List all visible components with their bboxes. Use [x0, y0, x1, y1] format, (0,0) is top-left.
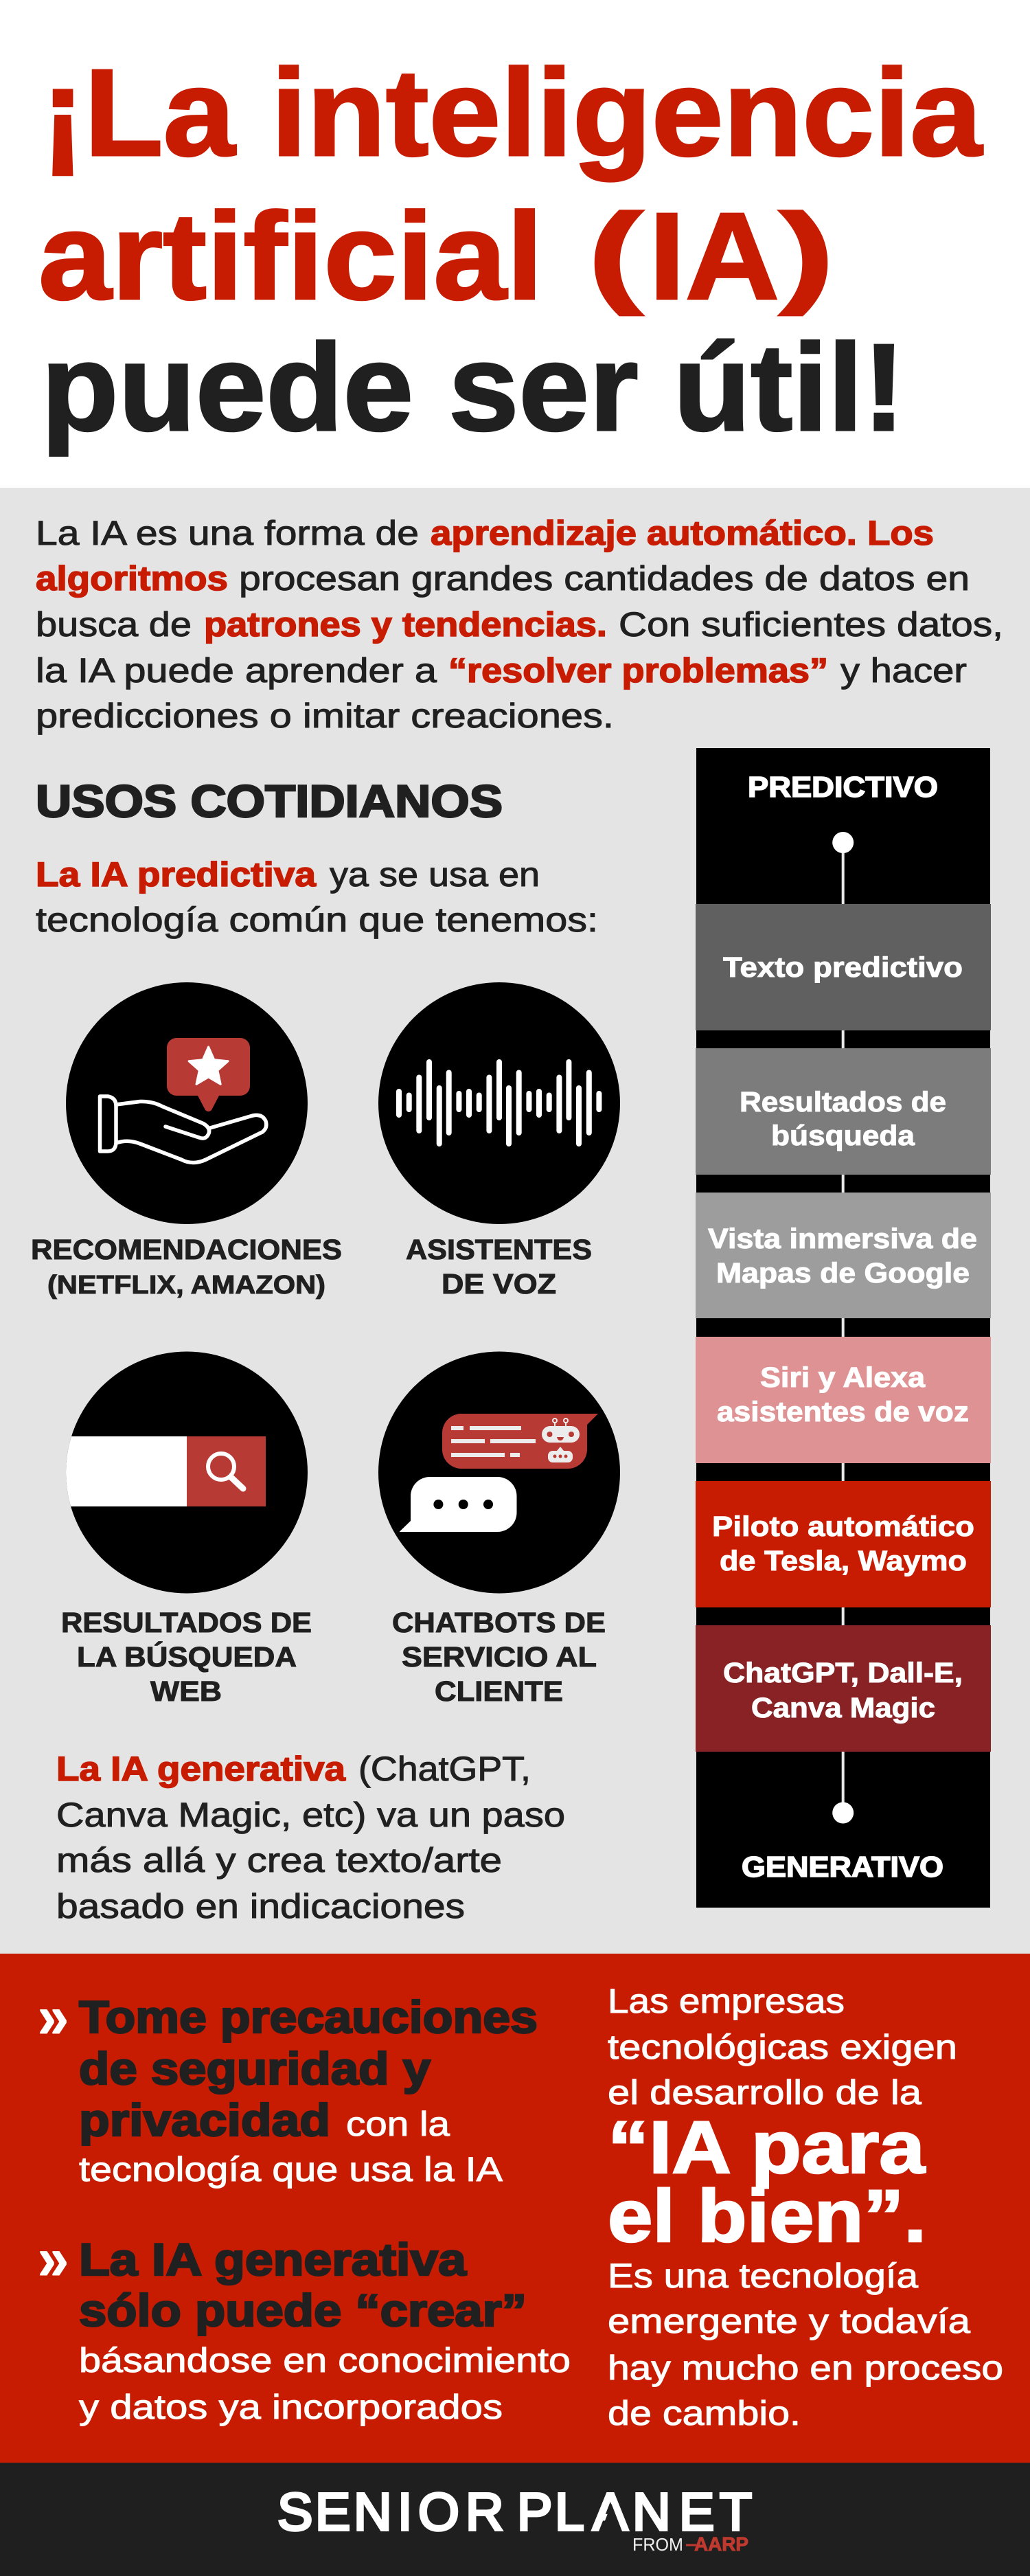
label: recomendaciones — [31, 1234, 342, 1300]
label: asistentes de voz: ASISTENTES — [406, 1234, 592, 1265]
logo: senior planet from aarp: FROM — [632, 2534, 683, 2555]
step: chatgpt: ChatGPT, Dall-E, — [723, 1657, 963, 1688]
text block: introduction: procesan grandes cantidades de datos en — [239, 559, 970, 598]
title: artificial — [38, 188, 543, 326]
step: resultados de búsqueda: búsqueda — [771, 1120, 915, 1151]
step: piloto automático: Piloto automático — [712, 1511, 974, 1542]
text block: introduction: Con suficientes datos, — [619, 605, 1003, 644]
step: texto predictivo: Texto predictivo — [723, 951, 963, 983]
text block: generative AI: Canva Magic, etc) va un paso — [56, 1796, 565, 1834]
label: asistentes de voz — [406, 1234, 592, 1300]
spectrum start dot — [832, 832, 854, 853]
callout: generative limits: La IA generativa — [79, 2234, 467, 2285]
logo: senior planet from aarp: AARP — [694, 2533, 748, 2555]
logo: senior planet from aarp: SENIOR — [277, 2483, 504, 2542]
step: resultados de búsqueda: Resultados de — [740, 1086, 946, 1118]
callout: generative limits: sólo puede “crear” — [79, 2285, 527, 2336]
label: resultados de la búsqueda web: WEB — [150, 1675, 222, 1707]
emphasis: ia para el bien — [608, 2105, 926, 2257]
step: siri y alexa: Siri y Alexa — [760, 1362, 926, 1393]
text block: predictive AI: ya se usa en — [330, 855, 540, 894]
panel: footer — [0, 2463, 1030, 2576]
title: IA — [649, 188, 779, 326]
icon: chatbot speech bubbles — [378, 1352, 620, 1594]
step: siri y alexa: asistentes de voz — [717, 1396, 969, 1427]
spectrum top label: PREDICTIVO — [748, 771, 938, 803]
callout: security and privacy — [38, 1982, 538, 2189]
callout: security and privacy: tecnología que usa la IA — [79, 2150, 503, 2189]
panel: red takeaways — [0, 1954, 1030, 2463]
chart: predictive to generative spectrum — [696, 748, 991, 1908]
title: puede ser útil! — [41, 319, 905, 457]
title: ) — [779, 190, 834, 316]
text block: introduction: La IA es una forma de — [36, 514, 419, 552]
text block: predictive AI: tecnología común que tenemos: — [36, 901, 598, 939]
step: vista inmersiva — [696, 1193, 991, 1318]
text block: introduction: algoritmos — [36, 559, 228, 598]
callout: generative limits: » — [38, 2224, 69, 2292]
step: piloto automático — [696, 1481, 991, 1607]
label: resultados de la búsqueda web: LA BÚSQUEDA — [77, 1641, 297, 1673]
step: vista inmersiva: Vista inmersiva de — [708, 1223, 977, 1254]
callout: security and privacy: de seguridad y — [79, 2043, 431, 2094]
spectrum bottom label: GENERATIVO — [742, 1851, 943, 1883]
icon: hand with recommendation star — [66, 982, 308, 1224]
icon: voice waveform — [378, 982, 620, 1224]
icon: search bar — [62, 1352, 308, 1594]
text block: AI for good: el desarrollo de la — [608, 2073, 922, 2112]
logo: senior planet from aarp — [277, 2483, 752, 2555]
emphasis: ia para el bien: el bien”. — [608, 2174, 926, 2257]
label: resultados de la búsqueda web — [61, 1607, 312, 1707]
callout: generative limits: básandose en conocimiento — [79, 2341, 571, 2380]
text block: AI for good: hay mucho en proceso — [608, 2349, 1003, 2387]
label: chatbots de servicio al cliente: SERVICIO AL — [402, 1641, 597, 1673]
text block: introduction — [36, 514, 1003, 735]
spectrum end dot — [832, 1803, 854, 1823]
text block: generative AI: La IA generativa — [56, 1750, 346, 1788]
text block: AI for good: Es una tecnología — [608, 2257, 918, 2295]
step: resultados de búsqueda — [696, 1048, 991, 1175]
text block: introduction: busca de — [36, 605, 192, 644]
callout: security and privacy: con la — [346, 2105, 450, 2143]
text block: AI for good: emergente y todavía — [608, 2302, 970, 2340]
step: chatgpt — [696, 1625, 991, 1752]
panel: title header — [0, 0, 1030, 488]
label: recomendaciones: RECOMENDACIONES — [31, 1234, 342, 1265]
text block: AI for good: de cambio. — [608, 2394, 801, 2432]
label: chatbots de servicio al cliente: CLIENTE — [435, 1675, 563, 1707]
callout: security and privacy: » — [38, 1982, 69, 2050]
text block: AI for good — [608, 1982, 1003, 2432]
title: ( — [588, 190, 643, 316]
label: chatbots de servicio al cliente: CHATBOTS DE — [392, 1607, 606, 1638]
title: ¡La inteligencia — [41, 44, 983, 182]
step: chatgpt: Canva Magic — [751, 1692, 935, 1724]
text block: introduction: aprendizaje automático. Los — [431, 514, 934, 552]
text block: predictive AI: La IA predictiva — [36, 855, 317, 894]
text block: AI for good: Las empresas — [608, 1982, 845, 2020]
label: recomendaciones: (NETFLIX, AMAZON) — [47, 1271, 325, 1300]
panel: everyday uses on grey background — [0, 488, 1030, 1954]
text block: generative AI — [56, 1750, 565, 1925]
label: chatbots de servicio al cliente — [392, 1607, 606, 1707]
title — [38, 44, 983, 457]
callout: generative limits — [38, 2224, 571, 2426]
text block: predictive AI — [36, 855, 598, 939]
text block: introduction: “resolver problemas” — [448, 651, 828, 690]
text block: introduction: predicciones o imitar creaciones. — [36, 697, 614, 735]
text block: generative AI: basado en indicaciones — [56, 1887, 465, 1925]
heading: usos cotidianos: USOS COTIDIANOS — [36, 776, 503, 826]
callout: generative limits: y datos ya incorporados — [79, 2388, 503, 2426]
step: vista inmersiva: Mapas de Google — [716, 1257, 970, 1289]
step: texto predictivo — [696, 904, 991, 1030]
logo: senior planet from aarp: PLANET — [517, 2483, 752, 2542]
emphasis: ia para el bien: “IA para — [608, 2105, 926, 2189]
label: resultados de la búsqueda web: RESULTADOS DE — [61, 1607, 312, 1638]
step: siri y alexa — [696, 1337, 991, 1463]
text block: introduction: patrones y tendencias. — [204, 605, 607, 644]
label: asistentes de voz: DE VOZ — [442, 1268, 556, 1300]
text block: generative AI: (ChatGPT, — [358, 1750, 531, 1788]
text block: introduction: y hacer — [840, 651, 967, 690]
text block: generative AI: más allá y crea texto/arte — [56, 1841, 502, 1879]
callout: security and privacy: privacidad — [79, 2094, 330, 2145]
text block: introduction: la IA puede aprender a — [36, 651, 437, 690]
step: piloto automático: de Tesla, Waymo — [720, 1545, 967, 1577]
callout: security and privacy: Tome precauciones — [79, 1991, 538, 2042]
text block: AI for good: tecnológicas exigen — [608, 2028, 957, 2066]
